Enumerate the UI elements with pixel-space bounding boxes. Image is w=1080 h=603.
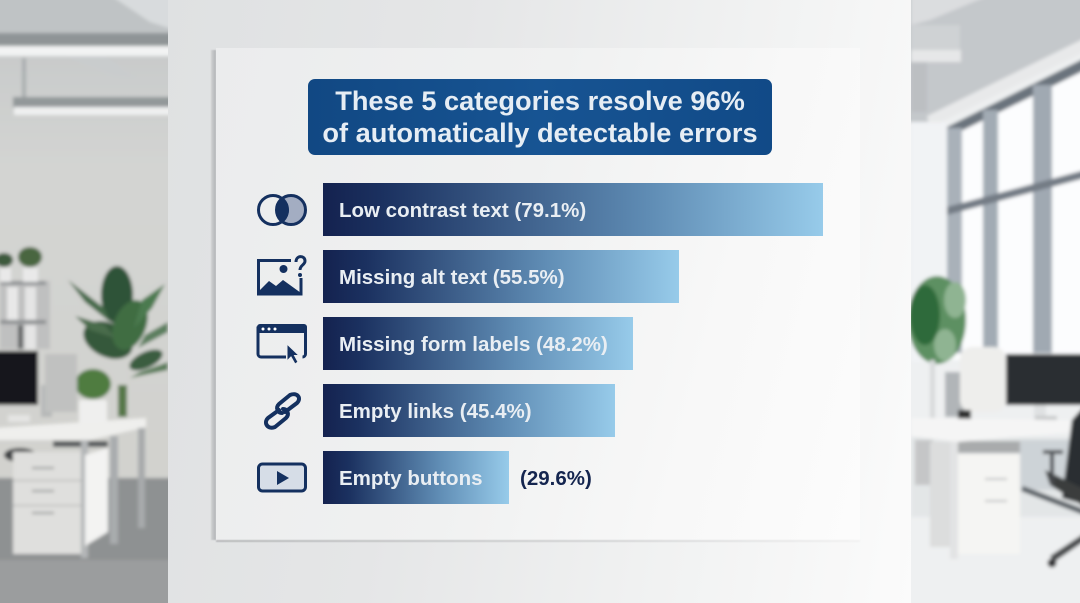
shelf [0,281,50,349]
wall panel [168,0,911,603]
title banner: of automatically detectable errors [322,117,758,148]
bar: empty buttons: Empty buttons [339,467,482,490]
bar: low contrast text [323,183,823,236]
plant right [908,276,966,364]
plant pot [958,410,971,426]
bar: missing alt text: Missing alt text (55.5%) [339,266,565,289]
bar: missing form labels: Missing form labels (48.2%) [339,333,608,356]
board edge shadow [211,50,216,540]
monitor [1006,354,1080,405]
chair [1062,404,1080,505]
small plant [75,369,111,399]
bar: missing form labels [323,317,633,370]
plant [118,385,127,417]
title banner [308,79,772,155]
bar: empty buttons [323,451,509,504]
bar: low contrast text: Low contrast text (79.1%) [339,199,586,222]
left office panel [0,0,175,603]
icon: browser window with cursor [256,324,307,364]
desk [0,418,146,440]
window frames [947,58,1080,138]
right office panel [905,0,1080,603]
bar: missing alt text [323,250,679,303]
bar: empty links [323,384,615,437]
desk [911,437,1080,517]
white board [216,48,860,541]
board bottom edge [216,540,860,542]
monitor [0,351,38,405]
title banner: These 5 categories resolve 96% [335,85,745,116]
value label: empty buttons: (29.6%) [520,467,592,490]
chair back [945,372,967,417]
icon: overlapping circles (contrast) [257,194,307,226]
icon: chain link [264,392,301,430]
bar: empty links: Empty links (45.4%) [339,400,532,423]
icon: image with question mark [257,255,306,296]
icon: video play button [257,462,307,492]
